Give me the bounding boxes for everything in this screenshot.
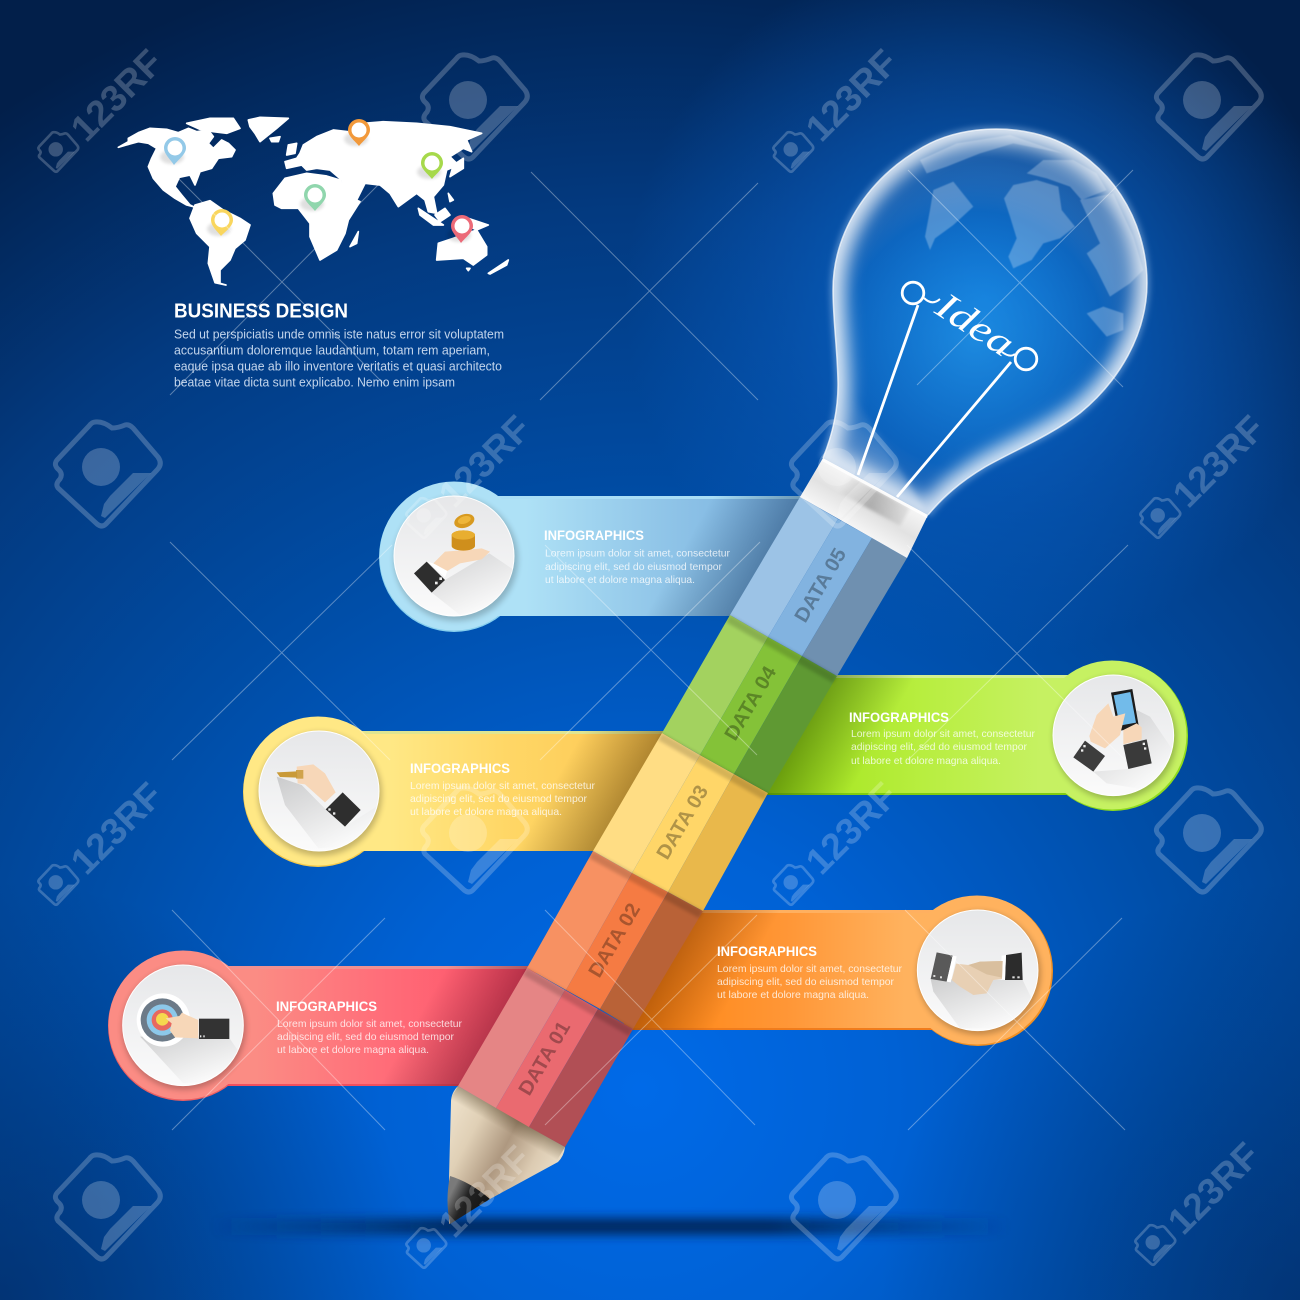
- text block: lorem 05: ut labore et dolore magna aliqua.: [545, 574, 695, 586]
- heading: infographics 04: INFOGRAPHICS: [849, 709, 949, 725]
- watermark logo: 123RF: [1165, 408, 1272, 515]
- watermark icon: [791, 1155, 896, 1259]
- segment: data 02: DATA 02: [585, 900, 645, 981]
- segment: data 02: [527, 851, 703, 1029]
- segment: data 03: [593, 733, 768, 911]
- watermark icon: [1156, 55, 1261, 159]
- segment: data 04: DATA 04: [721, 662, 782, 744]
- watermark logo: 123RF: [431, 408, 538, 515]
- ground shadow under pencil: [210, 1218, 1010, 1235]
- watermark icon: [55, 1155, 160, 1259]
- text block: lorem 03: Lorem ipsum dolor sit amet, consectetur: [410, 780, 595, 792]
- world map: [118, 117, 508, 285]
- pin: orange: [344, 119, 370, 146]
- heading: infographics 02: INFOGRAPHICS: [717, 943, 817, 959]
- text block: lorem 01: Lorem ipsum dolor sit amet, consectetur: [277, 1018, 462, 1030]
- text block: lorem 03: ut labore et dolore magna aliqua.: [410, 806, 562, 818]
- watermark logo: 123RF: [798, 42, 905, 149]
- panel: red ribbon: [108, 950, 540, 1101]
- segment: data 05: DATA 05: [791, 545, 851, 626]
- icon: handshake: [917, 910, 1038, 1031]
- icon: hands with phone: [1053, 675, 1174, 796]
- text block: lorem 02: Lorem ipsum dolor sit amet, consectetur: [717, 963, 902, 975]
- text block: business design body: [174, 328, 504, 390]
- lamp collar: [800, 458, 928, 558]
- filament: idea: [858, 282, 1037, 497]
- pin: teal: [300, 184, 326, 211]
- text block: lorem 01: adipiscing elit, sed do eiusmod tempor: [277, 1031, 454, 1043]
- watermark logo: [19, 768, 175, 925]
- panel: blue ribbon: [379, 482, 805, 632]
- watermark logo: 123RF: [431, 1138, 538, 1245]
- text block: lorem 04: ut labore et dolore magna aliqua.: [851, 755, 1001, 767]
- text block: lorem 05: Lorem ipsum dolor sit amet, consectetur: [545, 548, 730, 560]
- text block: lorem 02: adipiscing elit, sed do eiusmod tempor: [717, 976, 894, 988]
- globe continents on bulb: [823, 129, 1147, 515]
- panel: yellow ribbon: [243, 716, 690, 867]
- text block: business design body: beatae vitae dicta sunt explicabo. Nemo enim ipsam: [174, 376, 455, 390]
- icon: target and hand: [123, 965, 243, 1086]
- heading: business design: BUSINESS DESIGN: [174, 300, 348, 322]
- text block: lorem 05: [545, 548, 730, 586]
- pin: red: [447, 215, 473, 243]
- text block: business design body: accusantium doloremque laudantium, totam rem aperiam,: [174, 344, 490, 358]
- text block: lorem 01: [277, 1018, 462, 1056]
- panel: orange ribbon: [620, 896, 1053, 1046]
- watermark icon: [422, 55, 527, 159]
- watermark logo: [19, 35, 175, 192]
- segment shadows: [523, 615, 837, 1036]
- watermark icon: [1156, 788, 1261, 892]
- pencil tip: wood: [449, 1086, 565, 1224]
- light bulb: [823, 129, 1147, 515]
- text block: lorem 04: [851, 728, 1035, 767]
- heading: infographics 03: INFOGRAPHICS: [410, 760, 510, 776]
- segment: data 04: [662, 615, 837, 793]
- watermark logo: [387, 1131, 543, 1288]
- segment: data 03: DATA 03: [653, 782, 713, 863]
- pin: lime: [417, 152, 443, 179]
- segment: data 01: [458, 968, 633, 1147]
- text block: lorem 02: [717, 963, 902, 1001]
- pin: yellow: [207, 209, 233, 236]
- heading: infographics 05: INFOGRAPHICS: [544, 527, 644, 543]
- watermark logo: 123RF: [63, 42, 170, 149]
- watermark logo: [754, 768, 910, 925]
- watermark logo: [754, 35, 910, 192]
- text block: lorem 05: adipiscing elit, sed do eiusmod tempor: [545, 561, 722, 573]
- text block: lorem 04: adipiscing elit, sed do eiusmod tempor: [851, 741, 1027, 753]
- watermark logo: 123RF: [798, 775, 905, 882]
- text block: lorem 03: [410, 780, 595, 818]
- filament: idea: Idea: [927, 284, 1022, 365]
- icon: hand with coins: [394, 496, 514, 616]
- text block: lorem 02: ut labore et dolore magna aliqua.: [717, 989, 869, 1001]
- watermark logo: [387, 401, 543, 558]
- text block: lorem 01: ut labore et dolore magna aliqua.: [277, 1044, 429, 1056]
- pin: blue: [160, 137, 186, 165]
- icon: key and hand: [259, 731, 379, 851]
- text block: business design body: Sed ut perspiciatis unde omnis iste natus error sit voluptatem: [174, 328, 504, 342]
- pencil: [448, 458, 928, 1224]
- segment: data 05: [730, 497, 907, 676]
- watermark icon: [791, 422, 896, 526]
- text block: lorem 04: Lorem ipsum dolor sit amet, consectetur: [851, 728, 1035, 740]
- heading: infographics 01: INFOGRAPHICS: [276, 998, 377, 1014]
- text block: business design body: eaque ipsa quae ab illo inventore veritatis et quasi architecto: [174, 360, 502, 374]
- watermark logo: [1116, 1128, 1272, 1285]
- text block: lorem 03: adipiscing elit, sed do eiusmod tempor: [410, 793, 587, 805]
- segment: data 01: DATA 01: [515, 1018, 575, 1099]
- watermark logo: [1121, 401, 1277, 558]
- thin diagonal cross marks: [170, 170, 1133, 1130]
- watermark logo: 123RF: [63, 775, 170, 882]
- panel: green ribbon: [750, 660, 1188, 811]
- pencil tip: lead: [448, 1176, 490, 1224]
- map pins: [160, 119, 473, 243]
- watermark icon: [55, 422, 160, 526]
- watermark icon: [422, 788, 527, 892]
- watermark logo: 123RF: [1160, 1135, 1267, 1242]
